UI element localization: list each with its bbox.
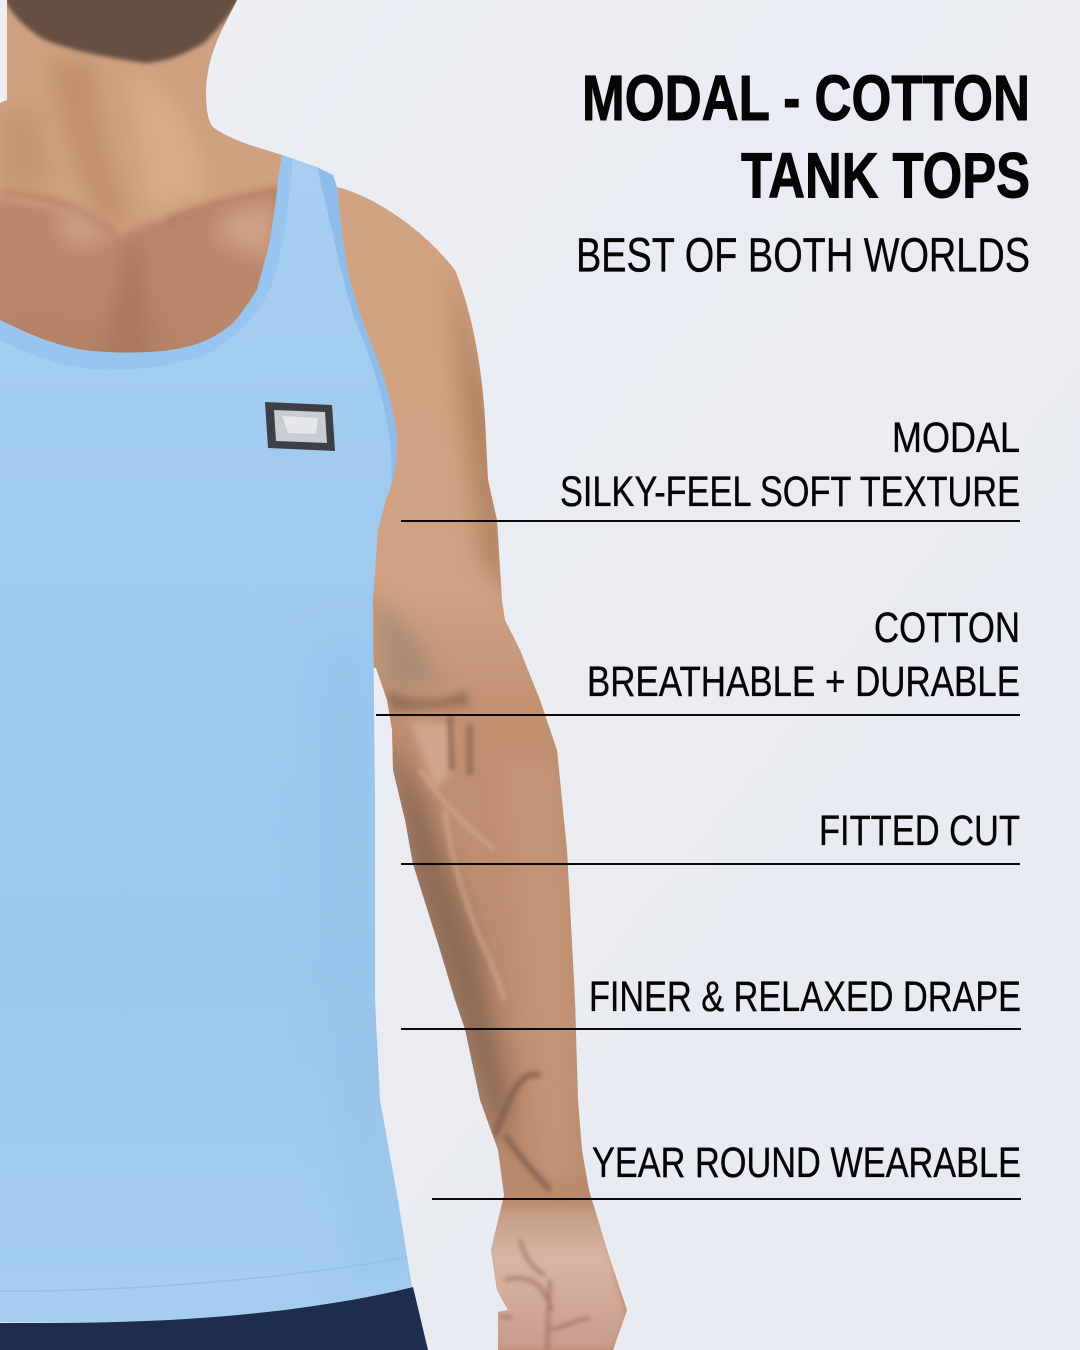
arm and shoulder xyxy=(337,187,627,1350)
feature: modal xyxy=(401,415,1020,522)
title xyxy=(582,62,1030,212)
tank top xyxy=(0,150,420,1330)
beard xyxy=(0,0,245,63)
feature: cotton: COTTON xyxy=(874,605,1020,652)
feature: cotton xyxy=(376,605,1020,716)
feature: modal: MODAL xyxy=(892,415,1020,462)
feature: fitted cut: FITTED CUT xyxy=(819,808,1020,855)
chest logo badge xyxy=(265,402,335,451)
model photo illustration xyxy=(0,0,640,1350)
neck and chest xyxy=(0,0,282,353)
pants waistband xyxy=(0,1287,428,1350)
